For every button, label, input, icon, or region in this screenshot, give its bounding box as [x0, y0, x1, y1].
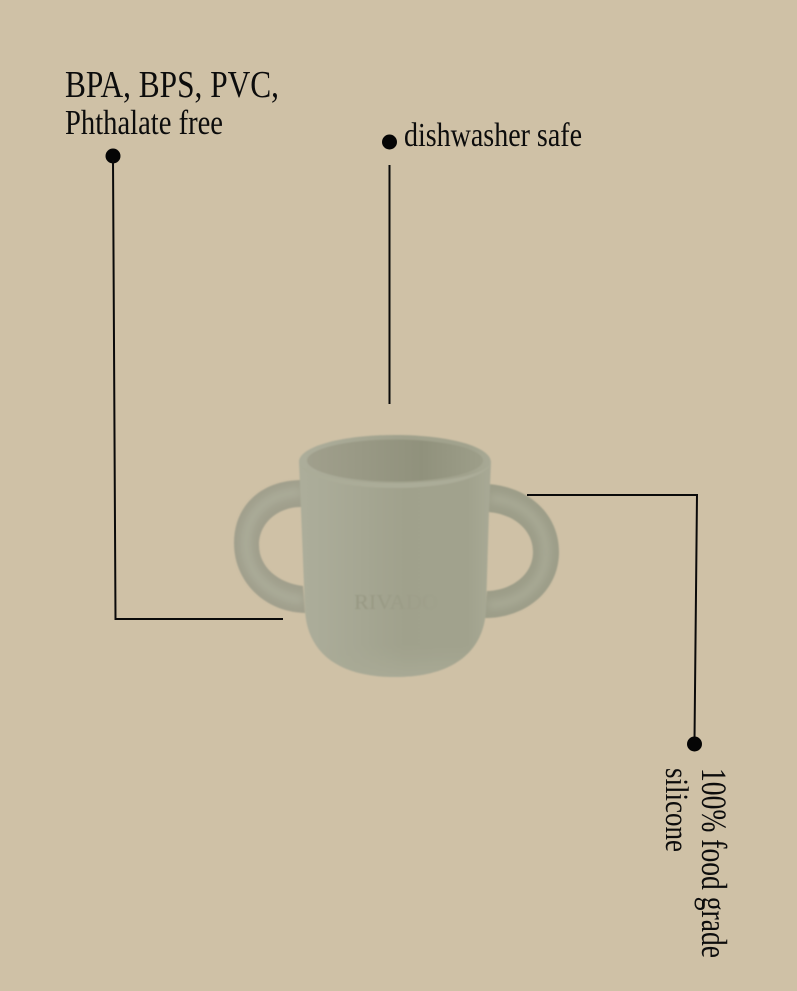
cup rim lip	[299, 462, 491, 488]
callout: food grade silicone	[527, 495, 734, 958]
callout leader line	[527, 495, 697, 740]
cup illustration	[234, 435, 559, 677]
callout leader line	[388, 165, 390, 404]
callout dot	[382, 134, 397, 150]
callout text: food grade silicone	[658, 768, 734, 958]
right handle	[485, 484, 559, 618]
cup interior	[307, 440, 483, 482]
left handle	[234, 480, 305, 613]
callout text: BPA free: BPA, BPS, PVC,	[65, 64, 279, 106]
engraved logo: RIVADO	[354, 590, 438, 614]
callout: dishwasher safe	[382, 117, 582, 404]
cup base highlight	[303, 560, 487, 677]
callout text: dishwasher safe: dishwasher safe	[404, 117, 582, 154]
callout text: food grade silicone: silicone	[658, 768, 694, 852]
cup body	[299, 435, 491, 677]
callout leader line	[113, 160, 283, 619]
callout dot	[106, 148, 120, 164]
callout dot	[687, 736, 702, 752]
callout: BPA free	[65, 64, 283, 619]
callout: BPA free: Phthalate free	[65, 103, 223, 142]
